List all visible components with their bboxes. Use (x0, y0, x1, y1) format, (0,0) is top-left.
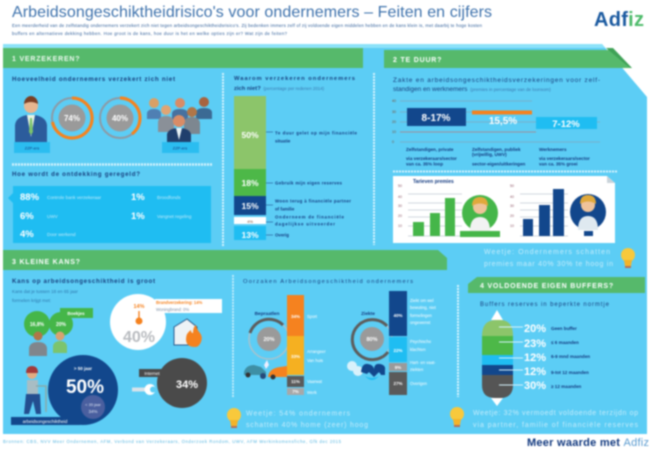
subheading: buffers: Buffers reserves in beperkte normtje (480, 302, 610, 308)
chart: premiepercentages: Zelfstandigen, publiek (472, 147, 521, 152)
text: toelichting: Kans dat je tussen 18 en 65 jaar (12, 289, 78, 294)
tip: premies (484, 249, 613, 268)
label: arbeidsongeschiktheid: arbeidsongeschiktheid (23, 419, 68, 424)
stacked bar: redenen: 4% (247, 219, 253, 224)
circle: 50%: 50% (66, 377, 104, 398)
ring chart: ongevallen: 20% (263, 337, 275, 343)
panel: ontdekking list: Door werkend (47, 232, 76, 237)
stacked bar: ziekte: Hart- en vaat- (410, 360, 436, 365)
circle: 40% (110, 294, 166, 350)
heading: 4 eigen buffers (468, 277, 645, 293)
chart: boei met percentages: 9-tot 12 maanden (551, 370, 589, 375)
icon: twee personen (29, 332, 67, 356)
panel: ontdekking list: 6% (20, 211, 34, 222)
stacked bar: ziekte: formelingen (410, 313, 433, 318)
chart: premiepercentages: Werknemers (539, 147, 567, 152)
chart: premiepercentages: 20 (392, 120, 396, 124)
chart: premiepercentages: 40 (392, 99, 396, 103)
subheading: redenen: zich niet? (percentage per redenen 2014) (234, 86, 325, 92)
stacked bar: ongevallen: 34% (291, 314, 300, 319)
stacked bar: ongevallen: Arrangeer (307, 349, 326, 354)
icon: huis in brand (174, 319, 202, 347)
ring chart: ongevallen: Bepraatlen (255, 311, 279, 317)
bar chart: vrouw groen (413, 198, 455, 236)
subheading: redenen: Waarom verzekeren ondernemers (234, 76, 355, 82)
circle: 50%: < 35 jaar (85, 402, 102, 407)
panel: tarieven voorbeeld: 50 (510, 184, 514, 188)
callout: brandverzekering (155, 299, 222, 313)
stacked bar: redenen: 13% (241, 230, 259, 240)
subheading: premies (393, 77, 600, 93)
subheading: ontdekking: Hoe wordt de ontdekking geregeld? (12, 171, 140, 178)
tip: premies: premies maar 40% 30% te hoog in (484, 261, 613, 268)
icon: group of people (147, 97, 212, 143)
tip: ongeval: Weetje: 54% ondernemers (246, 410, 350, 418)
tip: ongeval: schatten 40% home (zeer) hoog (246, 422, 368, 429)
tip: buffers: Weetje: 32% vermoedt voldoende terzijdn op (473, 410, 638, 417)
chart: boei met percentages: ≤ 6 maanden (551, 340, 579, 345)
intro text: buffers en alternatieve dekking hebben. Hoe groot is de kans, hoe duur is het en welke opties zijn er? Wat zijn de feiten? (12, 31, 288, 36)
stacked bar: ziekte: 9% (395, 365, 401, 370)
icon: single entrepreneur (15, 96, 47, 142)
stacked bar: ongevallen: 33% (291, 354, 300, 359)
panel: ontdekking list: Vangnet regeling (157, 214, 192, 219)
icon: lightbulb (621, 248, 635, 268)
stacked bar: ziekte: 22% (393, 348, 403, 353)
label: arbeidsongeschiktheid (11, 417, 80, 425)
chart: premiepercentages: 30 (392, 110, 396, 114)
panel: tarieven voorbeeld: 30 (398, 204, 402, 208)
heading: 2 te duur (384, 48, 632, 68)
stacked bar: redenen: Onderneem de financiële (275, 214, 345, 220)
stacked bar: ziekte: Overigen (410, 381, 428, 386)
subheading: premies: Zakte en arbeidsongeschiktheidsverzekeringen voor zelf- (393, 77, 600, 84)
panel: ontdekking list (8, 186, 211, 243)
circles: beroepen: Boekjes (67, 311, 85, 316)
panel: tarieven voorbeeld: 10 (510, 224, 514, 228)
circles: beroepen: 16,8% (30, 322, 45, 328)
heading: 3 kleine kans (3, 250, 447, 270)
stacked bar: ziekte: klachten (410, 347, 426, 352)
stacked bar: ongevallen: Van huis (307, 358, 323, 363)
chart: premiepercentages: van ca. 35% groei (539, 162, 578, 166)
panel: ontdekking list: 4% (20, 229, 34, 240)
tip: ongeval (246, 410, 368, 429)
stacked bar: ziekte: 40% (393, 313, 403, 318)
chart: premiepercentages: sector-eigen/uitkeringen (472, 162, 526, 166)
stacked bar: redenen: dagelijkse uitvoerder (275, 222, 335, 226)
circles: beroepen: 20% (56, 322, 67, 328)
stacked bar: ziekte: Ziekt om wel (410, 298, 434, 303)
logo: Adfiz: Adfiz (594, 9, 644, 31)
stacked bar: ziekte: 27% (393, 381, 403, 386)
label: werknemers: ZZP-ers (173, 146, 187, 150)
chart: premiepercentages: 7-12% (552, 119, 580, 130)
stacked bar: ongevallen: Sport (307, 314, 318, 319)
panel: 1 verzekeren (3, 48, 363, 246)
label: zzp-ers: ZZP-ers (25, 146, 39, 150)
chart: boei met percentages: 12% (524, 366, 546, 378)
stacked bar: ziekte: ziekten (410, 367, 424, 372)
stacked bar: ongevallen: 11% (291, 379, 300, 384)
stacked bar: ziekte (389, 291, 437, 395)
intro text: Een meerderheid van de zelfstandig ondernemers verzekert zich niet tegen arbeidsongeschiktheidsrisico's. Zij bedenken immers zelf of zij voldoende eigen middelen hebben en de kans klein is, met daarbij te hoge kosten (12, 23, 483, 28)
ring chart: 74% (52, 98, 92, 138)
panel: 2 te duur (384, 48, 635, 268)
chart: boei met percentages: ≥ 12 maanden (551, 384, 582, 389)
chart: premiepercentages: via verzekeraars/sector (539, 156, 590, 161)
ring chart: ongevallen (249, 311, 289, 359)
chart: boei met percentages: 6-9 mnd maanden (551, 354, 590, 359)
stacked bar: redenen: Gebruik mijn eigen reserves (275, 180, 343, 186)
label: werknemers (162, 142, 199, 153)
panel: ontdekking list: Broodfonds (157, 195, 181, 200)
figure: man met krukken (24, 366, 46, 414)
panel: ontdekking list: 1% (131, 192, 145, 203)
intro text (12, 23, 483, 36)
stacked bar: redenen: of familie (275, 206, 295, 212)
circles: beroepen (24, 308, 93, 337)
subheading: kans: Kans op arbeidsongeschiktheid is groot (12, 278, 155, 285)
circle: 50%: 34% (88, 409, 98, 414)
chart: premiepercentages: 8-17% (422, 113, 451, 124)
stacked bar: redenen: 15% (241, 201, 259, 211)
chart: boei met percentages: 12% (524, 352, 546, 364)
chart: premiepercentages: 15,5% (489, 116, 517, 127)
callout: brandverzekering: Woningbrand: 0% (156, 307, 189, 312)
circle: 40%: 14% (133, 304, 145, 310)
tip: premies: Weetje: Ondernemers schatten (484, 249, 610, 256)
title: Arbeidsongeschiktheidrisico's voor ondernemers – Feiten en cijfers (12, 4, 492, 21)
panel: 4 eigen buffers (450, 277, 645, 429)
bar chart: vrouw blauw (523, 189, 564, 236)
callout: brandverzekering: Brandverzekering: 14% (156, 300, 203, 305)
ring chart: 74%: 74% (64, 114, 80, 123)
icon: sleutel (132, 384, 156, 395)
text: toelichting (12, 289, 78, 303)
chart: boei met percentages (482, 310, 590, 406)
panel: tarieven voorbeeld: 20 (510, 214, 514, 218)
subheading: premies: standigen en werknemers (premies in percentage van de loonsom) (393, 86, 551, 93)
text: toelichting: formelen krijgt met: (12, 298, 51, 303)
ring chart: ziekte (352, 311, 392, 360)
heading: 4 eigen buffers: 4 VOLDOENDE EIGEN BUFFERS? (480, 283, 614, 290)
stacked bar: ziekte: Psychische (410, 339, 432, 344)
panel: 3 kleine kans (3, 250, 447, 429)
panel: tarieven voorbeeld: 40 (510, 195, 514, 199)
stacked bar: redenen: situatie (275, 138, 291, 144)
panel: tarieven voorbeeld: Tarieven premies (413, 179, 454, 185)
chart: boei met percentages: 23% (524, 338, 546, 350)
circle: 50%: > 50 jaar (74, 366, 92, 371)
icon: hart en longen (347, 361, 385, 380)
label: zzp-ers (14, 142, 50, 153)
panel: ontdekking list: 88% (20, 192, 40, 203)
circle: 34% (139, 358, 207, 408)
icon: vrouw in groene cirkel (460, 195, 500, 237)
ring chart: 40%: 40% (112, 114, 128, 123)
top light strip (3, 44, 605, 48)
subheading: verzekering: Hoeveelheid ondernemers verzekert zich niet (12, 76, 175, 83)
icon: vrouw in blauwe cirkel (570, 194, 606, 236)
heading: 1 verzekeren: 1 VERZEKEREN? (12, 56, 80, 63)
tip: buffers (473, 410, 638, 429)
heading: 1 verzekeren (3, 48, 363, 68)
chart: boei met percentages: 20% (524, 323, 546, 335)
stacked bar: ongevallen: 7% (292, 389, 299, 394)
tip: buffers: via partner, familie of financiële reserves (473, 422, 638, 429)
chart: boei met percentages: Geen buffer (551, 326, 577, 331)
chart: premiepercentages: van ca. 35% loop (406, 162, 443, 166)
ring chart: ziekte: 80% (366, 337, 378, 343)
panel: tarieven voorbeeld: 10 (398, 224, 402, 228)
subheading: oorzaken: Oorzaken Arbeidsongeschiktheid ondernemers (243, 279, 413, 285)
stacked bar: ongevallen: Vaarwat (307, 379, 323, 384)
panel: tarieven voorbeeld: 40 (398, 195, 402, 199)
stacked bar: redenen: Overig (275, 232, 289, 238)
panel: tarieven voorbeeld: 50 (398, 184, 402, 188)
chart: premiepercentages (392, 99, 600, 166)
ring chart: 40% (100, 98, 140, 138)
panel: tarieven voorbeeld (393, 176, 615, 243)
ring chart: ziekte: Ziekte (361, 311, 375, 317)
footer slogan: Meer waarde met Adfiz (527, 437, 649, 449)
icon: lightbulb (450, 407, 464, 427)
icon: lightbulb (227, 408, 241, 428)
circle: 50% (48, 355, 118, 425)
circle: 34%: 34% (176, 379, 198, 391)
chart: premiepercentages: via verzekeraars/sector (406, 156, 457, 161)
chart: premiepercentages: 0 (392, 140, 394, 144)
stacked bar: redenen: Woon terug à financiële partner (275, 198, 351, 204)
chart: premiepercentages: (vrijwillig, UWV) (472, 152, 507, 157)
chart: premiepercentages: Zelfstandigen, private (406, 147, 454, 152)
heading: 2 te duur: 2 TE DUUR? (393, 57, 442, 64)
stacked bar: redenen: 50% (241, 130, 259, 140)
panel: tarieven voorbeeld: 20 (398, 214, 402, 218)
panel: ontdekking list: UWV (47, 214, 59, 219)
icon: auto-ongeluk (244, 360, 287, 380)
heading: 3 kleine kans: 3 KLEINE KANS? (12, 259, 81, 266)
stacked bar: redenen (234, 96, 358, 240)
stacked bar: ongevallen (287, 295, 326, 395)
circle: 40%: 40% (123, 329, 155, 346)
chart: boei met percentages: 30% (524, 380, 546, 392)
stacked bar: ongevallen: Werk (307, 390, 318, 395)
subheading: redenen (234, 76, 355, 92)
stacked bar: ziekte: bewuting, niet (410, 305, 437, 310)
stacked bar: redenen: Te duur gelet op mijn financiële (275, 130, 358, 136)
panel: ontdekking list: Controle bank verzekeraar (47, 195, 102, 200)
stacked bar: ziekte: ongewenst (410, 320, 431, 325)
stacked bar: redenen: 18% (241, 178, 259, 188)
chart: premiepercentages: 10 (392, 130, 396, 134)
panel: tarieven voorbeeld: 30 (510, 204, 514, 208)
panel: ontdekking list: 1% (131, 211, 145, 222)
source note: Bronnen: CBS, NVV Meer Ondernemen, AFM, Verbond van Verzekeraars, Onderzoek Rondom, UWV, AFM Werkinkomensfiche, Gfk dec 2015 (3, 439, 342, 444)
circle: 34%: Internet (144, 371, 160, 376)
